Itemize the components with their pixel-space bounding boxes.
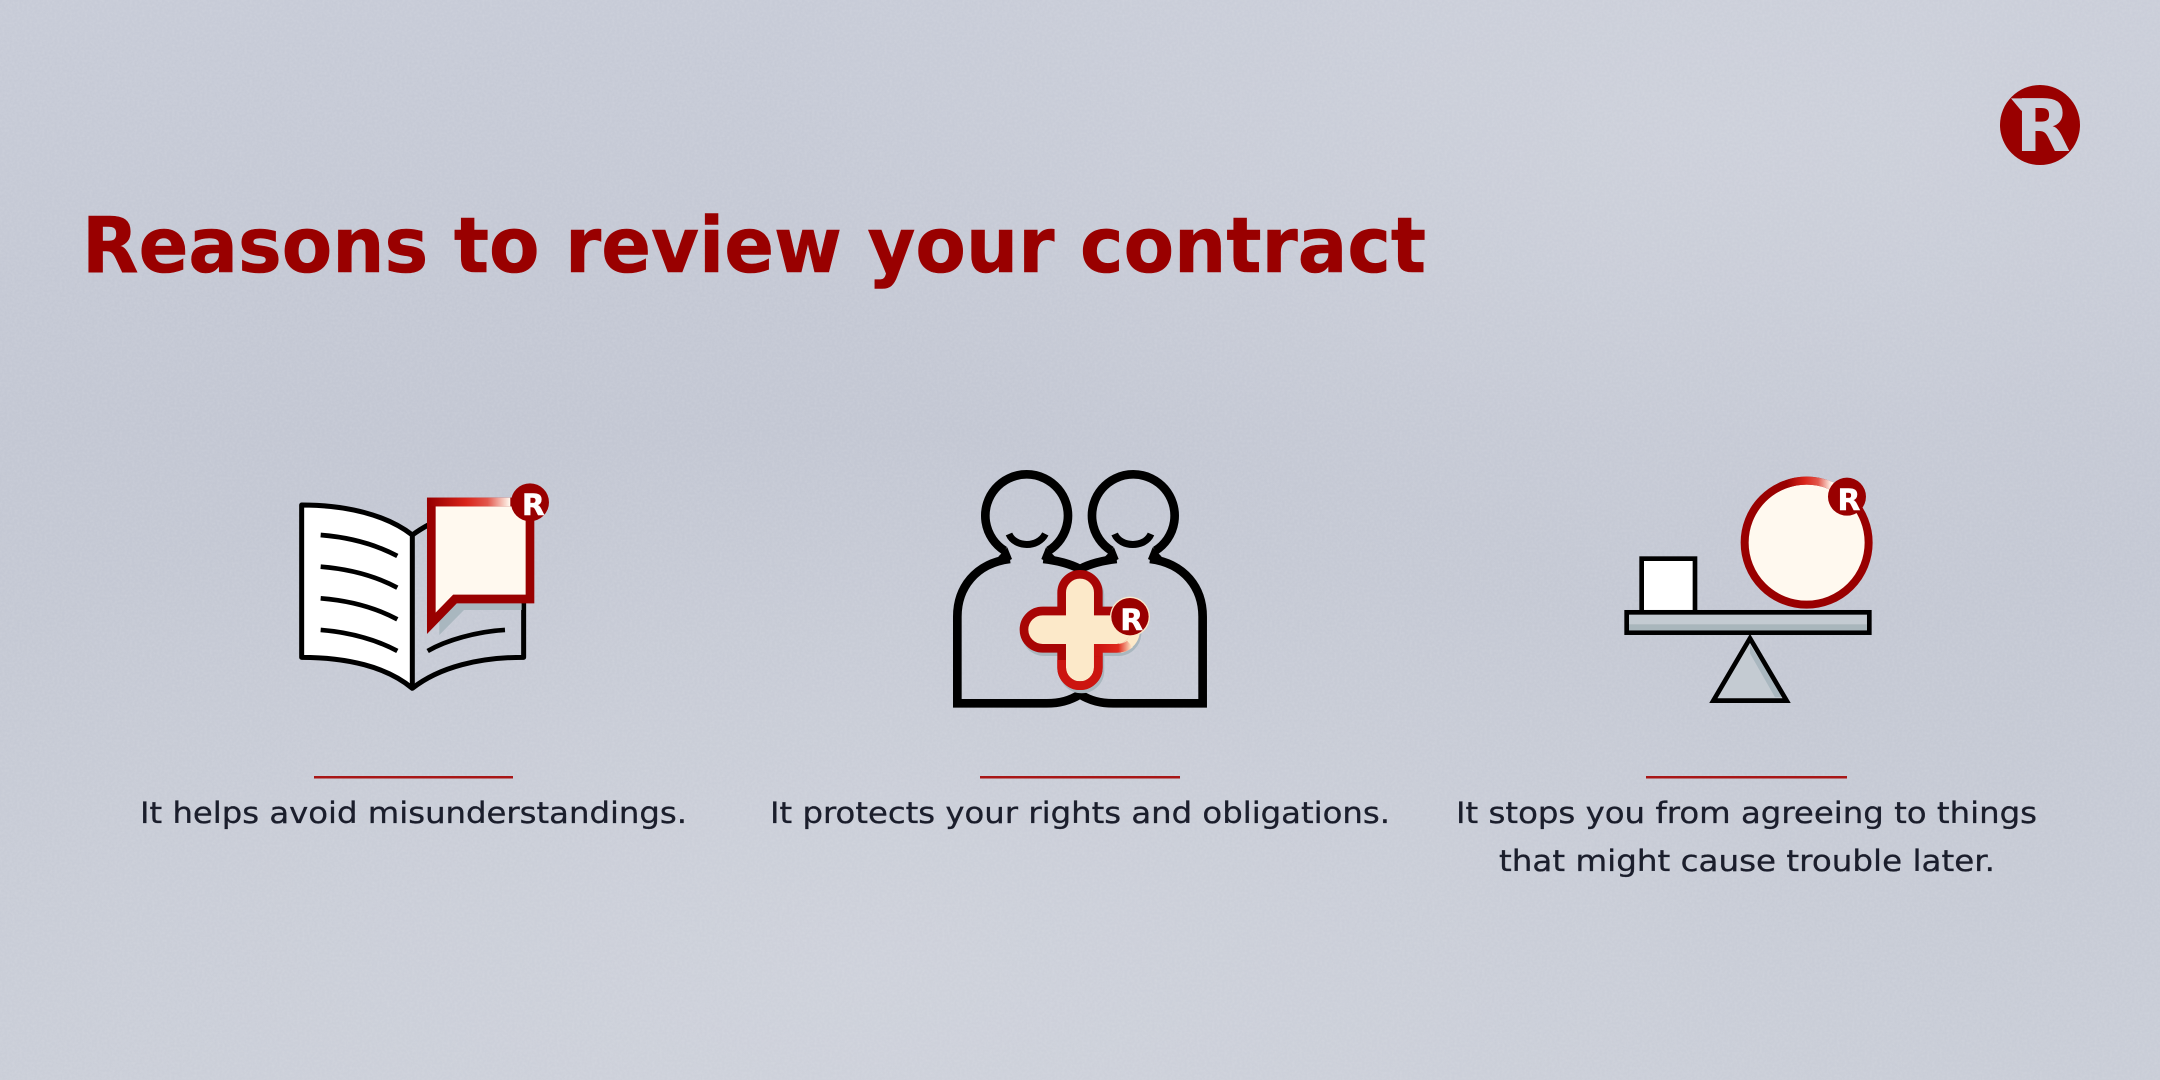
icon: balance scale with box and ball: [1627, 478, 1869, 701]
divider: first column: [314, 776, 513, 778]
divider: second column: [980, 776, 1180, 778]
icon: open book with speech bubble: [302, 483, 549, 688]
icon: two people with medical cross: [957, 474, 1203, 703]
text: first reason: It helps avoid misunderstandings.: [140, 796, 687, 830]
icon: open book with speech bubble: R: [522, 487, 545, 522]
text: third reason: that might cause trouble later.: [1499, 844, 1995, 878]
text: third reason: It stops you from agreeing to things: [1456, 796, 2037, 830]
text: second reason: It protects your rights and obligations.: [770, 796, 1390, 830]
icon: two people with medical cross: R: [1120, 602, 1143, 637]
logo: R badge: [2000, 84, 2080, 168]
logo: R badge: R: [2015, 84, 2071, 168]
title: Reasons to review your contract: [82, 202, 1426, 291]
divider: third column: [1646, 776, 1847, 778]
icon: balance scale with box and ball: R: [1838, 482, 1861, 517]
text: third reason: [1456, 796, 2037, 878]
